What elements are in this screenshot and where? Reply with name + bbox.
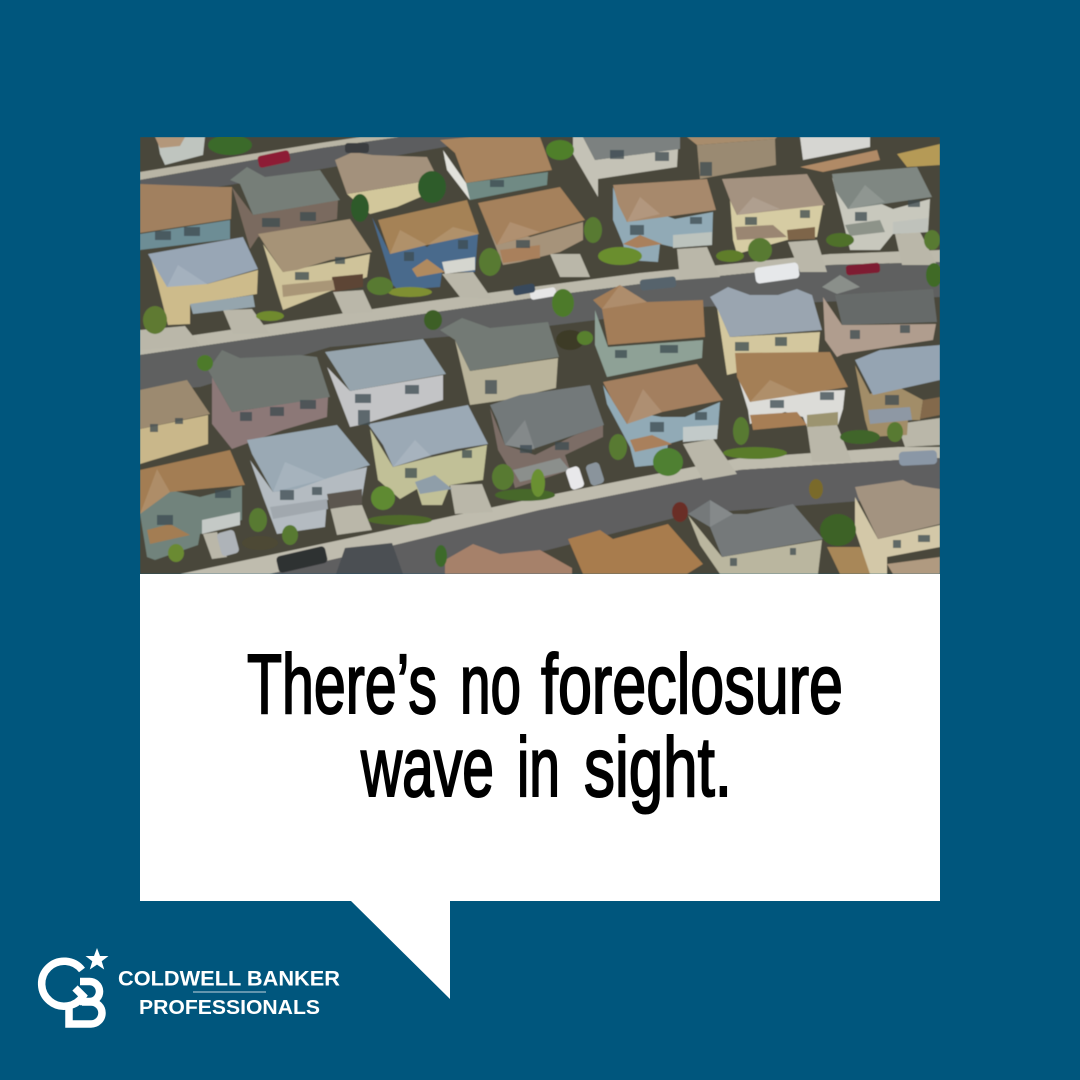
roads bbox=[140, 137, 940, 574]
second row houses bbox=[148, 167, 932, 325]
title: no bbox=[460, 637, 521, 731]
logo: Coldwell Banker Professionals bbox=[42, 948, 340, 1024]
title: wave bbox=[360, 720, 494, 814]
bottom row houses bbox=[336, 480, 940, 574]
house windows bbox=[150, 150, 930, 566]
driveways bbox=[140, 232, 940, 559]
title: sight. bbox=[584, 720, 732, 814]
company name: PROFESSIONALS bbox=[139, 997, 320, 1019]
icon: CB monogram with star bbox=[42, 948, 108, 1024]
speech bubble panel bbox=[140, 574, 940, 999]
cars on middle road bbox=[512, 262, 880, 300]
company name: COLDWELL BANKER bbox=[118, 968, 340, 990]
third row houses bbox=[208, 275, 940, 488]
fourth row houses bbox=[140, 380, 488, 560]
title: foreclosure bbox=[541, 637, 843, 731]
trees and shrubs bbox=[143, 135, 942, 567]
title bbox=[247, 637, 843, 814]
title: There’s bbox=[247, 637, 437, 731]
top row houses bbox=[140, 137, 940, 250]
cars on lower road bbox=[216, 450, 937, 573]
aerial photo of suburban houses bbox=[140, 135, 942, 574]
title: in bbox=[517, 720, 560, 814]
company name bbox=[118, 968, 340, 1019]
cars on top road bbox=[257, 143, 369, 168]
roof facets bbox=[140, 185, 885, 527]
